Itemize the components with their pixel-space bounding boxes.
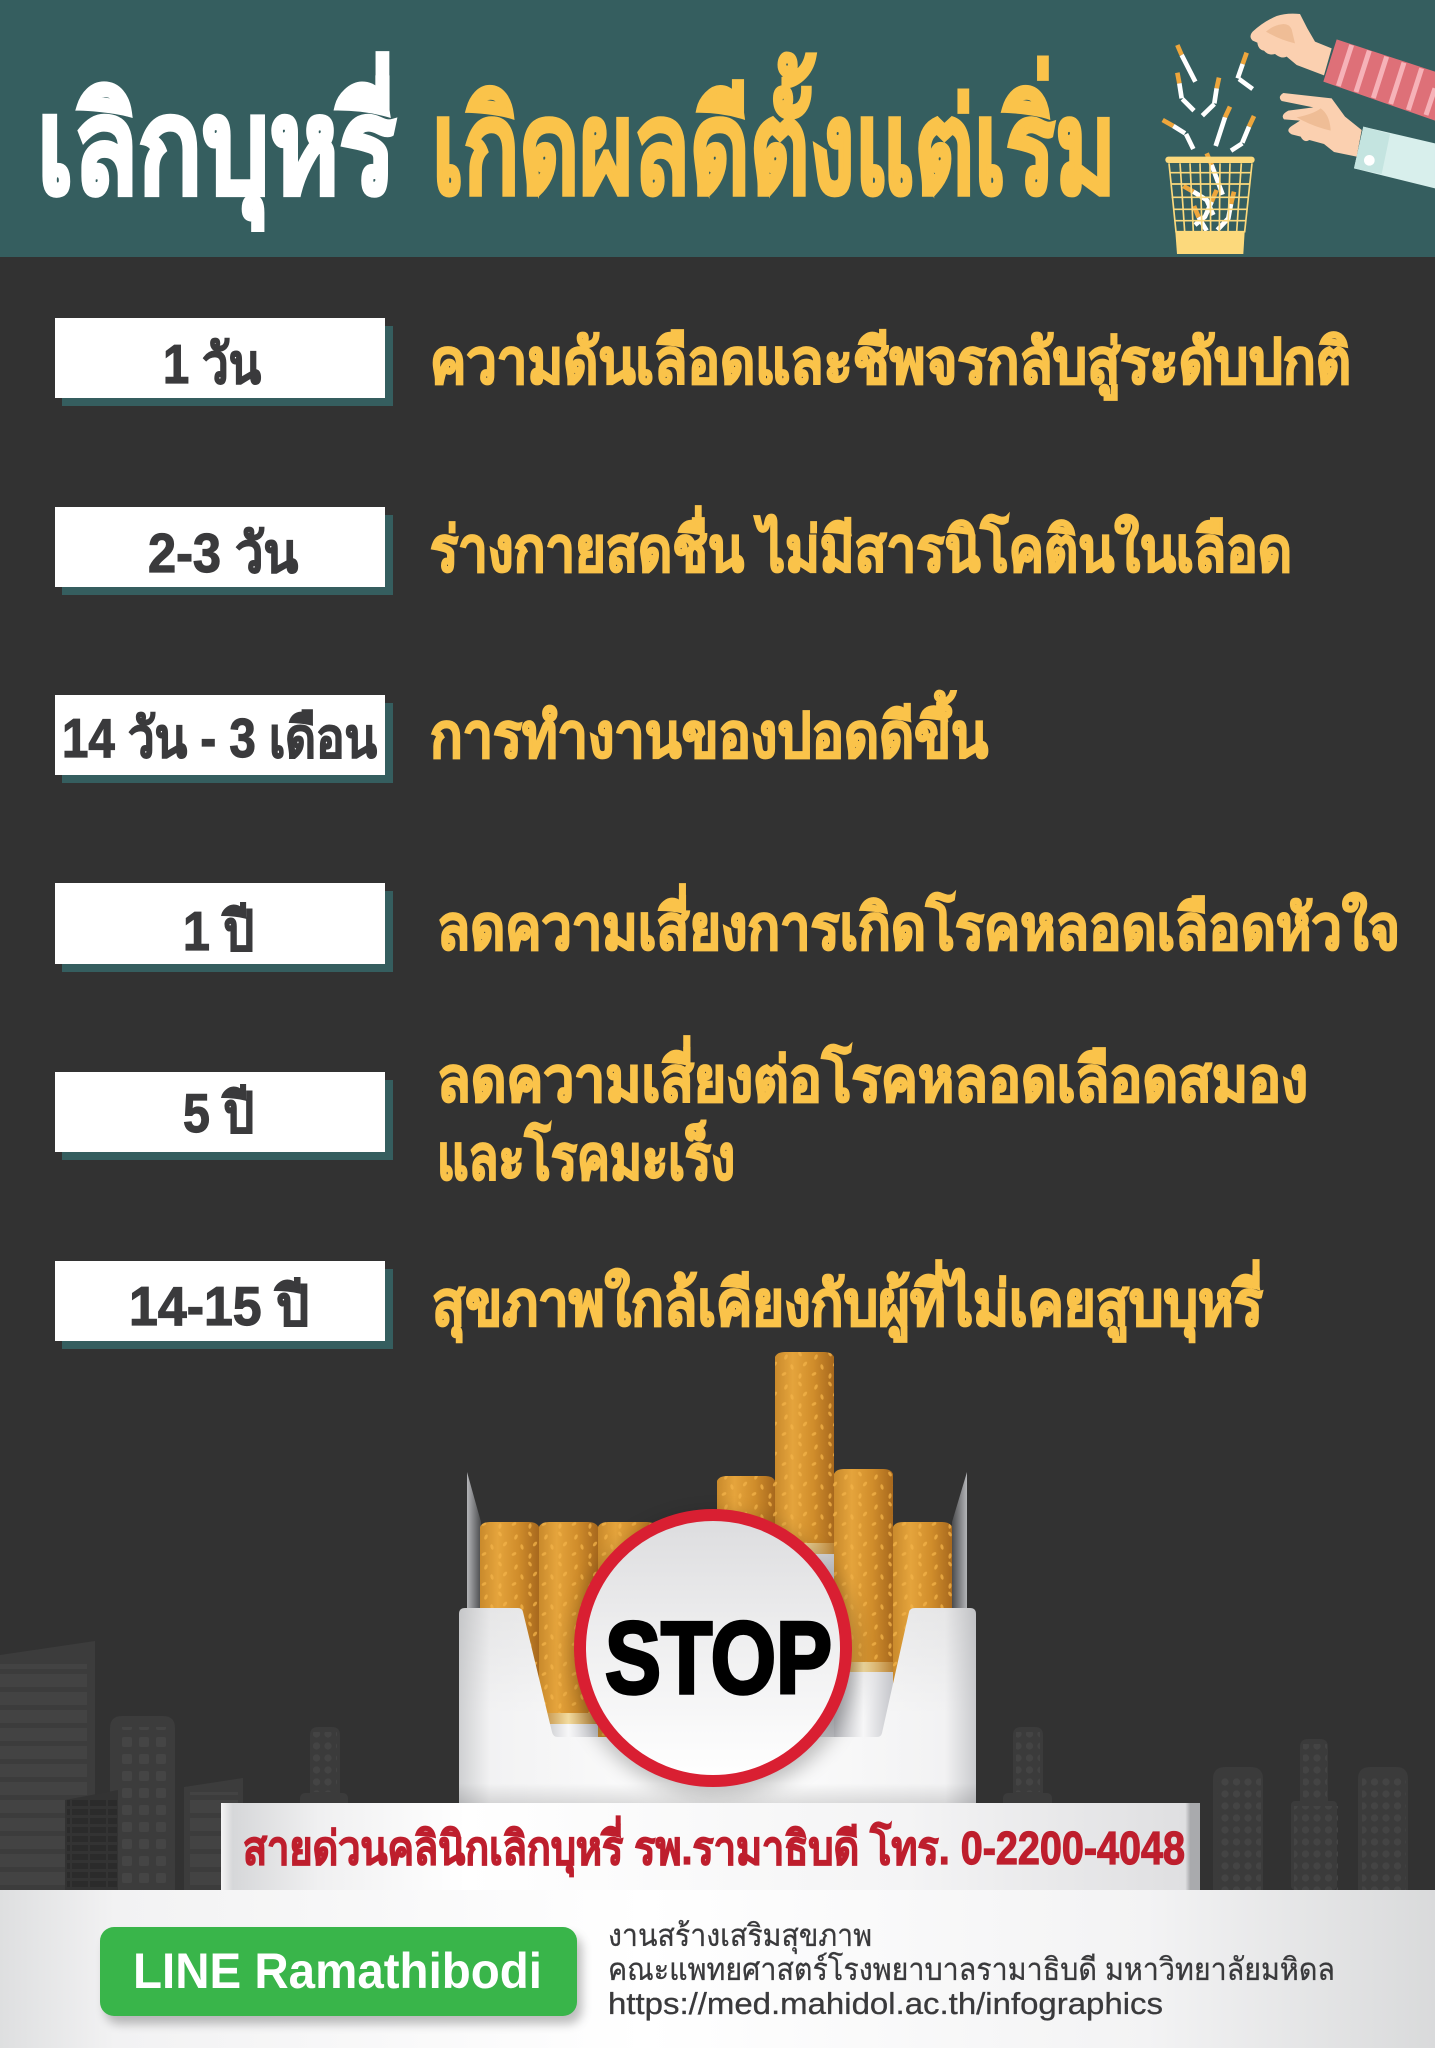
footer credits: https://med.mahidol.ac.th/infographics (608, 1986, 1163, 2021)
stop sign: STOP (605, 1601, 832, 1715)
header band (0, 0, 1435, 257)
timeline row 2: ร่างกายสดชื่น ไม่มีสารนิโคตินในเลือด (430, 506, 1292, 585)
icon: pack side flaps (467, 1472, 967, 1610)
icon: falling cigarettes (1163, 45, 1254, 151)
timeline row 3 (55, 690, 988, 783)
footer credits: คณะแพทยศาสตร์โรงพยาบาลรามาธิบดี มหาวิทยาลัยมหิดล (608, 1952, 1335, 1987)
icon: waste bin (1165, 157, 1255, 254)
cigarette pack (459, 1352, 976, 1803)
hotline banner (221, 1803, 1200, 1890)
icon: pack front (459, 1608, 976, 1803)
timeline row 5: และโรคมะเร็ง (437, 1120, 735, 1193)
title: เกิดผลดีตั้งแต่เริ่ม (432, 52, 1116, 221)
timeline row 3: การทำงานของปอดดีขึ้น (430, 690, 988, 771)
footer credits (608, 1918, 1335, 2021)
timeline row 6: 14-15 ปี (129, 1275, 309, 1337)
icon: striped sleeve (1323, 39, 1435, 121)
timeline row 6 (55, 1260, 1263, 1349)
timeline row 1 (55, 318, 1351, 406)
timeline row 5 (55, 1036, 1308, 1193)
footer band (0, 1890, 1435, 2048)
line button (100, 1927, 582, 2024)
icon: upper hand (1250, 14, 1332, 75)
icon: cigarettes (480, 1352, 952, 1737)
hotline banner: สายด่วนคลินิกเลิกบุหรี่ รพ.รามาธิบดี โทร. 0-2200-4048 (243, 1816, 1185, 1877)
title (37, 52, 1116, 230)
city skyline (0, 1641, 1408, 1890)
title: เลิกบุหรี่ (37, 52, 396, 230)
timeline row 5: 5 ปี (183, 1082, 254, 1144)
footer credits: งานสร้างเสริมสุขภาพ (608, 1918, 872, 1955)
timeline row 5: ลดความเสี่ยงต่อโรคหลอดเลือดสมอง (437, 1036, 1308, 1115)
timeline row 2: 2-3 วัน (148, 522, 298, 584)
icon: shirt sleeve (1354, 127, 1435, 188)
timeline row 2 (55, 506, 1292, 595)
timeline row 3: 14 วัน - 3 เดือน (62, 707, 377, 769)
illustration: hands dropping cigarettes into a bin (1163, 14, 1435, 254)
stop sign (573, 1515, 857, 1795)
timeline row 1: 1 วัน (163, 333, 261, 395)
icon: lower hand (1280, 93, 1362, 157)
line button: LINE Ramathibodi (133, 1943, 542, 1999)
timeline row 6: สุขภาพใกล้เคียงกับผู้ที่ไม่เคยสูบบุหรี่ (432, 1260, 1263, 1342)
icon: cigarettes inside bin (1183, 153, 1234, 231)
timeline row 4: 1 ปี (183, 900, 254, 962)
timeline row 4 (55, 883, 1400, 972)
